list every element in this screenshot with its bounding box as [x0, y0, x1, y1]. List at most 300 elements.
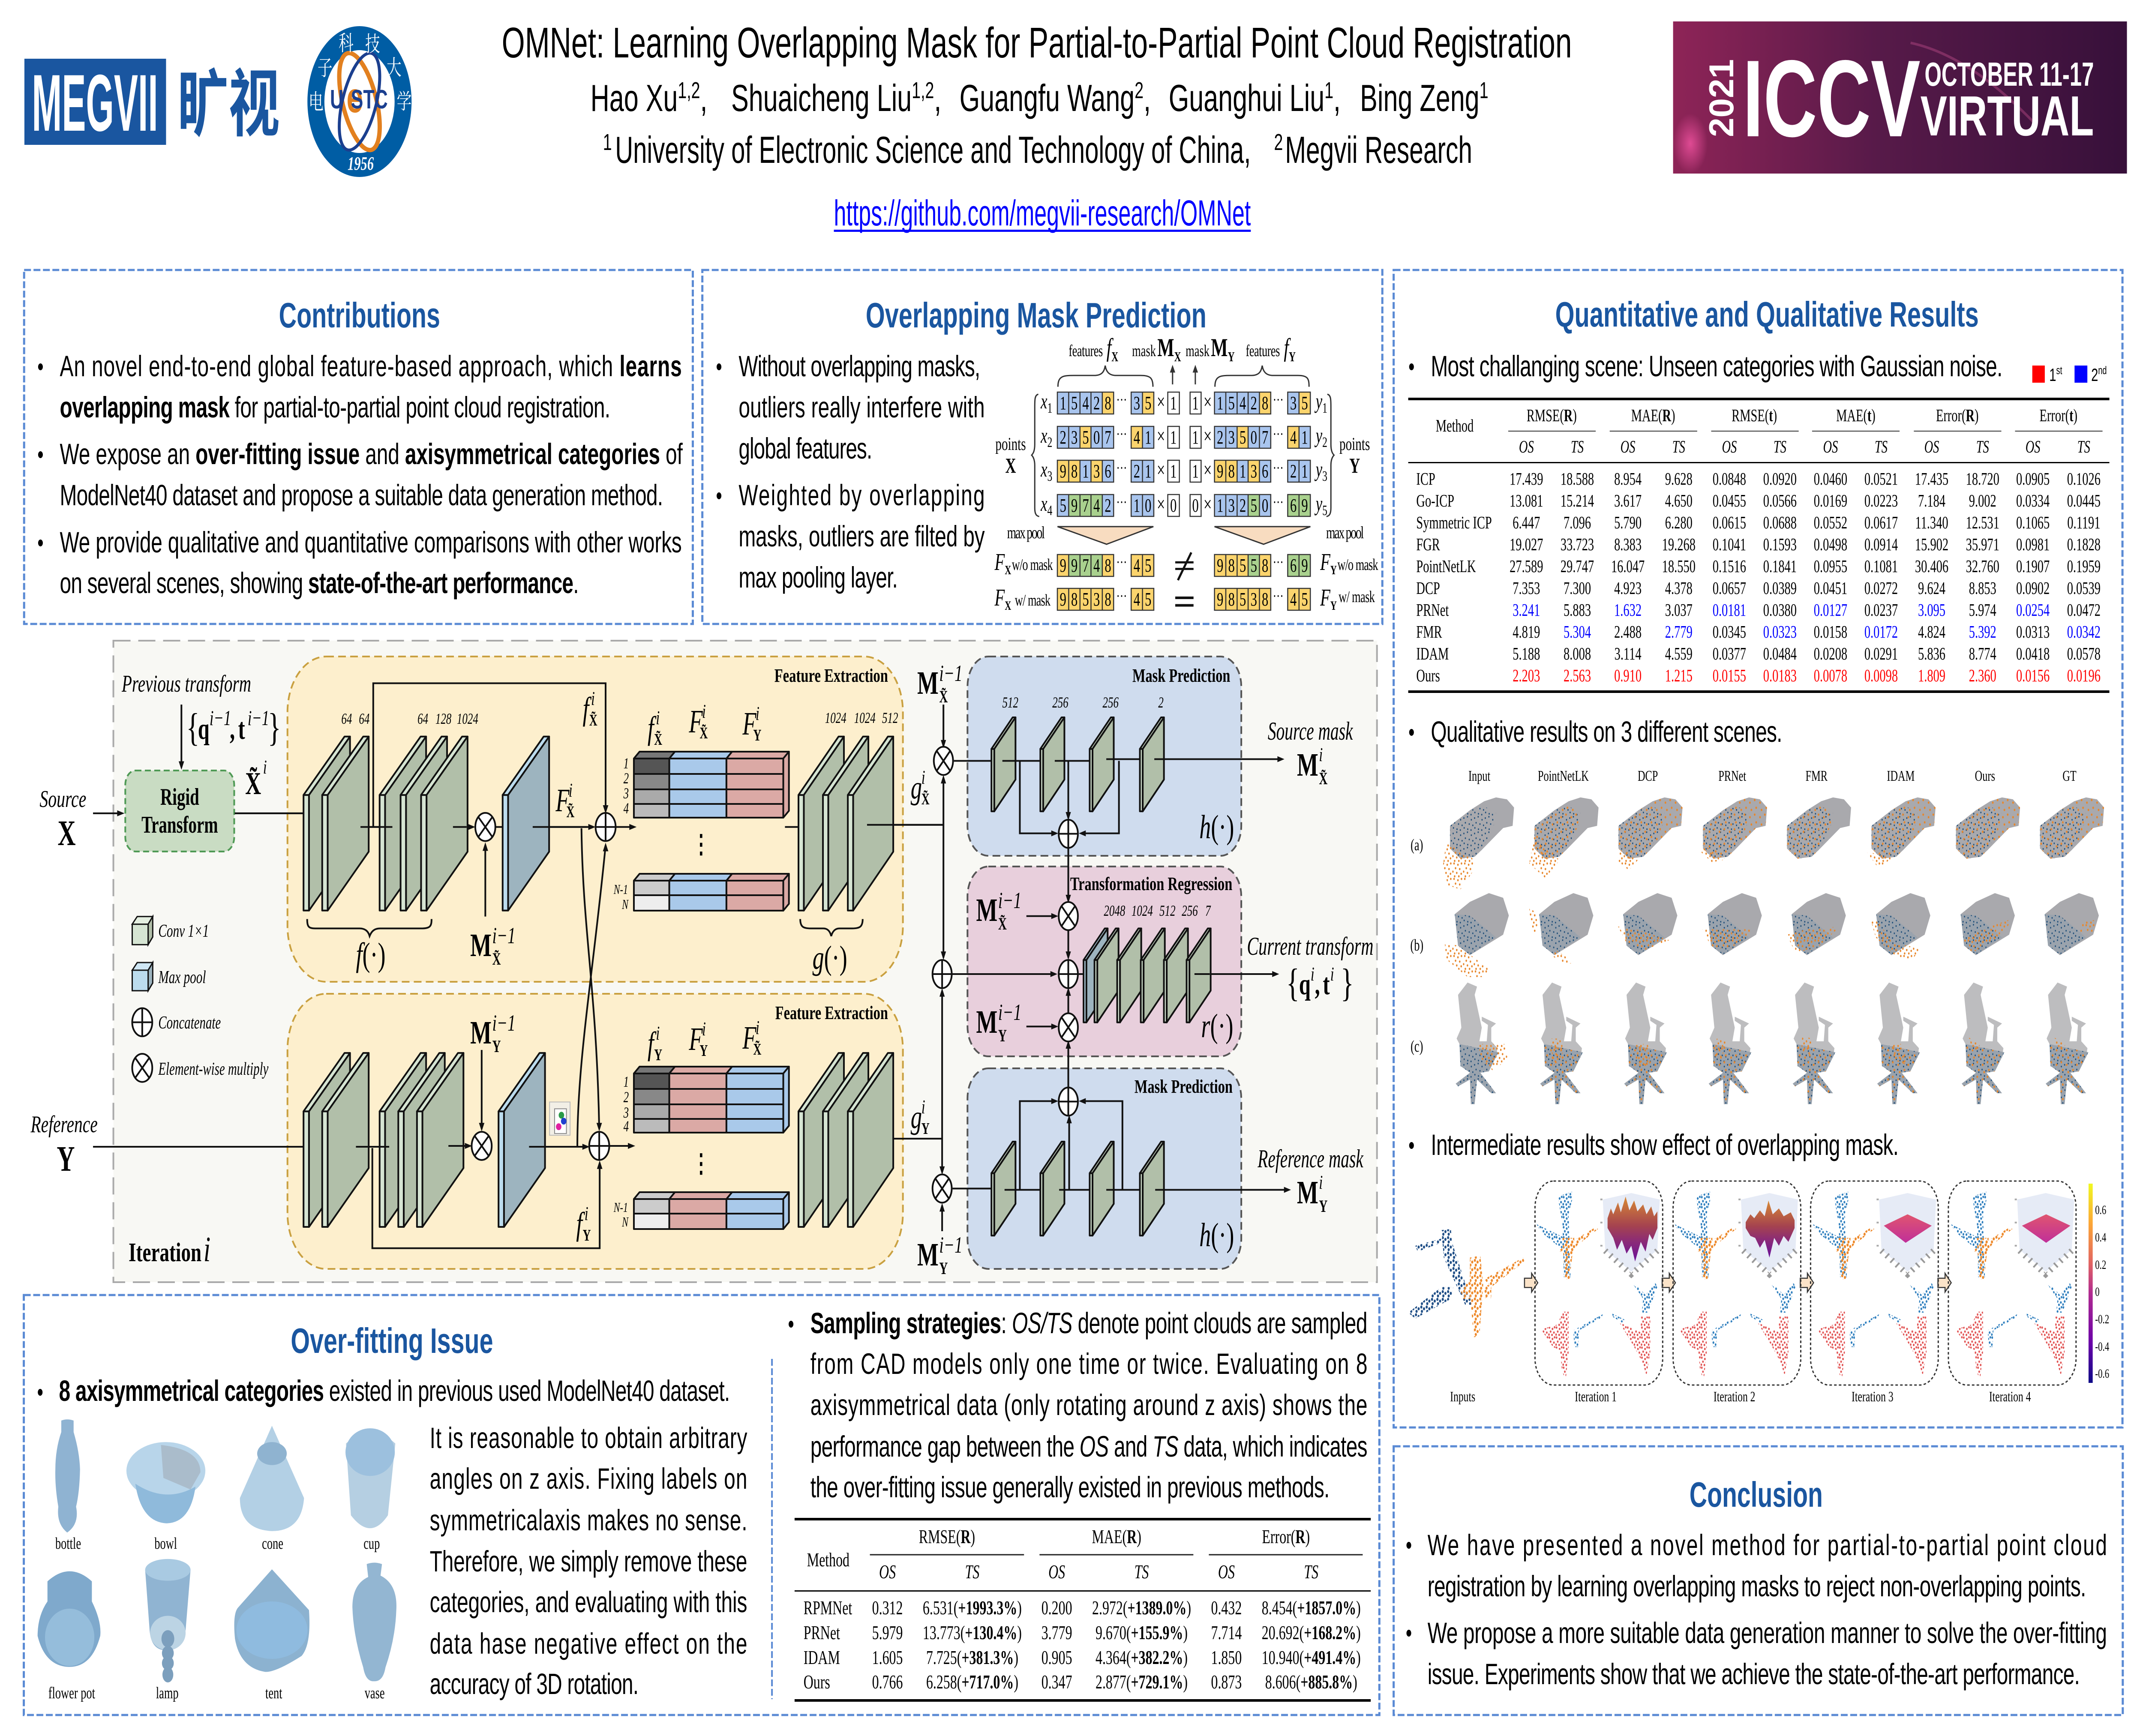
table: quantitative comparison: TS: [1571, 437, 1584, 456]
feature stacks: 2: [624, 1088, 629, 1106]
table: quantitative comparison: 8.774: [1969, 644, 1996, 663]
table: sampling strategy comparison: RPMNet: [804, 1597, 852, 1619]
max pool figure: ···: [1273, 553, 1284, 571]
max pool figure: ···: [1273, 391, 1284, 408]
axisymmetrical object thumbnails: bottle: [55, 1535, 81, 1553]
diagram text labels: Mask Prediction: [1132, 666, 1230, 686]
max pool figure: X: [1005, 563, 1011, 577]
table: quantitative comparison: [1408, 398, 2110, 693]
table: quantitative comparison: 6.280: [1665, 513, 1693, 532]
table: quantitative comparison: 0.0181: [1713, 600, 1746, 620]
table: quantitative comparison: 6.447: [1513, 513, 1540, 532]
bullet: sampling strategies: [789, 1306, 1368, 1504]
table: sampling strategy comparison: 9.670(+155.9%): [1096, 1622, 1188, 1643]
table: sampling strategy comparison: 5.979: [872, 1622, 903, 1643]
max pool figure: Y: [1330, 563, 1337, 577]
table: quantitative comparison: 0.0615: [1713, 513, 1746, 532]
table: quantitative comparison: 9.002: [1969, 491, 1996, 510]
table: quantitative comparison: 0.1516: [1713, 557, 1746, 576]
bullet: sampling strategies: Sampling strategies: OS/TS denote point clouds are sampled: [810, 1306, 1368, 1340]
legend: first and second place colours: nd: [2098, 364, 2107, 377]
diagram text labels: 256: [1103, 693, 1119, 711]
table: quantitative comparison: Symmetric ICP: [1416, 513, 1492, 532]
table: quantitative comparison: 0.0472: [2067, 600, 2101, 620]
table: quantitative comparison: 4.650: [1665, 491, 1693, 510]
table: quantitative comparison: 0.0451: [1814, 579, 1847, 598]
diagram text labels: Y: [699, 1042, 708, 1060]
table: quantitative comparison: 3.037: [1665, 600, 1693, 620]
paragraph: axis labels explanation: angles on z axis. Fixing labels on: [430, 1462, 747, 1495]
axisymmetrical object thumbnails: flower pot: [48, 1684, 95, 1702]
table: quantitative comparison: 0.910: [1614, 666, 1642, 685]
table: sampling strategy comparison: MAE(R): [1092, 1526, 1141, 1547]
diagram text labels: i: [569, 779, 573, 801]
table: quantitative comparison: 0.0313: [2016, 622, 2050, 642]
intermediate results figure: Iteration 2: [1714, 1389, 1755, 1405]
max pool figure: M: [1211, 334, 1228, 362]
qualitative results figure: PointNetLK: [1538, 768, 1589, 784]
table: sampling strategy comparison: Error(R): [1262, 1526, 1310, 1547]
paragraph: axis labels explanation: data hase negative effect on the: [430, 1627, 747, 1660]
intermediate results figure: Iteration 4: [1989, 1389, 2031, 1405]
diagram text labels: Iteration: [129, 1237, 201, 1267]
qualitative results figure: (c): [1411, 1037, 1423, 1055]
table: sampling strategy comparison: 1.605: [872, 1646, 903, 1668]
qualitative results figure: FMR: [1806, 768, 1828, 784]
diagram text labels: M: [470, 1015, 492, 1051]
max pool figure: y: [1316, 492, 1322, 516]
feature stacks: N-1: [613, 881, 628, 897]
table: sampling strategy comparison: 2.877(+729.1%): [1096, 1671, 1188, 1693]
table: quantitative comparison: Error(t): [2040, 406, 2077, 425]
max pool figure: ···: [1273, 425, 1284, 443]
table: sampling strategy comparison: 0.347: [1041, 1671, 1072, 1693]
diagram text labels: Reference mask: [1258, 1145, 1364, 1173]
axisymmetrical object thumbnails: lamp: [156, 1684, 179, 1702]
table: quantitative comparison: 0.0183: [1763, 666, 1797, 685]
table: quantitative comparison: 9.624: [1918, 579, 1945, 598]
overlapping mask bullet list: global features.: [738, 432, 872, 465]
table: quantitative comparison: 0.1065: [2016, 513, 2050, 532]
table: quantitative comparison: 0.0196: [2067, 666, 2101, 685]
max pool figure: x: [1041, 492, 1047, 516]
qualitative results figure: (a): [1411, 836, 1423, 854]
table: sampling strategy comparison: 0.873: [1211, 1671, 1242, 1693]
diagram text labels: M: [917, 666, 939, 701]
logo: UESTC seal: 学: [397, 90, 411, 114]
axisymmetrical object thumbnails: [38, 1419, 396, 1702]
missing image icon: [549, 1102, 570, 1135]
diagram text labels: Current transform: [1247, 932, 1373, 961]
max pool figure: 5974210001325069: [1060, 495, 1308, 516]
max pool figure: ···: [1117, 391, 1127, 408]
diagram text labels: ,: [230, 712, 235, 746]
table: quantitative comparison: 8.383: [1614, 535, 1642, 554]
table: quantitative comparison: 15.902: [1915, 535, 1948, 554]
table: quantitative comparison: OS: [1924, 437, 1939, 456]
diagram text labels: 1024: [854, 709, 876, 726]
authors: Hao Xu: [591, 77, 678, 120]
max pool figure: X: [1111, 349, 1118, 364]
table: quantitative comparison: 18.588: [1561, 469, 1594, 489]
table: quantitative comparison: 0.0342: [2067, 622, 2101, 642]
table: sampling strategy comparison: 0.200: [1041, 1597, 1072, 1619]
rigid transform box: Rigid: [160, 784, 199, 810]
diagram text labels: r(·): [1201, 1007, 1234, 1044]
diagram text labels: h(·): [1199, 1216, 1234, 1253]
table: quantitative comparison: 4.824: [1918, 622, 1945, 642]
authors: Shuaicheng Liu: [731, 77, 912, 120]
conclusion bullet list: We have presented a novel method for partial-to-partial point cloud: [1428, 1528, 2107, 1562]
max pool figure: ···: [1117, 493, 1127, 511]
table: quantitative comparison: 0.0418: [2016, 644, 2050, 663]
table: quantitative comparison: 0.0552: [1814, 513, 1847, 532]
table: quantitative comparison: 0.0981: [2016, 535, 2050, 554]
feature stacks: 4: [624, 799, 629, 817]
diagram text labels: M: [917, 1237, 939, 1273]
diagram text labels: F: [689, 704, 703, 740]
max pool figure: X: [1005, 598, 1011, 613]
max pool figure: w/ mask: [1339, 588, 1375, 606]
legend: first and second place colours: 1: [2049, 365, 2056, 385]
max pool figure: f: [1107, 334, 1111, 362]
diagram text labels: i−1: [939, 1233, 963, 1258]
table: sampling strategy comparison: TS: [1135, 1561, 1149, 1583]
network flow lines, layers left half: [93, 683, 636, 1248]
table: quantitative comparison: Method: [1436, 416, 1474, 435]
table: quantitative comparison: 0.0445: [2067, 491, 2101, 510]
axisymmetrical object thumbnails: cone: [262, 1535, 283, 1553]
table: quantitative comparison: 30.406: [1915, 557, 1948, 576]
diagram text labels: Y: [57, 1139, 75, 1179]
diagram text labels: X̃: [699, 724, 708, 742]
max pool figure: w/o mask: [1337, 556, 1378, 574]
table: quantitative comparison: 0.1907: [2016, 557, 2050, 576]
feature stacks: [613, 752, 789, 1229]
legend: first and second place colours: st: [2056, 364, 2062, 377]
max pool figure: points: [995, 434, 1026, 454]
diagram text labels: q: [198, 712, 210, 746]
table: quantitative comparison: 2.203: [1513, 666, 1540, 685]
diagram text labels: X̃: [1319, 769, 1328, 788]
diagram text labels: i: [656, 707, 660, 729]
table: quantitative comparison: TS: [1976, 437, 1989, 456]
intermediate results figure: 0.4: [2095, 1230, 2106, 1244]
diagram text labels: i−1: [998, 888, 1021, 914]
title: OMNet: Learning Overlapping Mask for Partial-to-Partial Point Cloud Registration: [502, 19, 1572, 67]
diagram text labels: 7: [1205, 902, 1211, 919]
qualitative results figure: (b): [1410, 936, 1423, 954]
diagram text labels: {: [1286, 961, 1300, 1005]
table: quantitative comparison: TS: [2077, 437, 2090, 456]
logo: UESTC seal: 技: [365, 33, 380, 57]
paragraph: axis labels explanation: symmetricalaxis makes no sense.: [430, 1503, 747, 1537]
table: quantitative comparison: TS: [1774, 437, 1786, 456]
qualitative results figure: Input: [1468, 768, 1491, 784]
region: mask prediction reference: [967, 1068, 1241, 1269]
table: sampling strategy comparison: PRNet: [804, 1622, 840, 1643]
table: sampling strategy comparison: 0.432: [1211, 1597, 1242, 1619]
diagram text labels: 512: [882, 709, 898, 726]
table: quantitative comparison: 0.0208: [1814, 644, 1847, 663]
table: quantitative comparison: 0.0905: [2016, 469, 2050, 489]
diagram text labels: F: [689, 1022, 703, 1057]
table: quantitative comparison: 0.0617: [1864, 513, 1898, 532]
intermediate results figure: [1408, 1181, 2109, 1405]
table: sampling strategy comparison: IDAM: [804, 1646, 840, 1668]
table: quantitative comparison: 18.550: [1662, 557, 1696, 576]
table: sampling strategy comparison: OS: [1218, 1561, 1235, 1583]
logo: UESTC seal: e: [346, 74, 363, 122]
table: quantitative comparison: 27.589: [1510, 557, 1543, 576]
table: quantitative comparison: 0.0127: [1814, 600, 1847, 620]
max pool figure: ···: [1117, 425, 1127, 443]
diagram text labels: 2048: [1104, 902, 1126, 919]
max pool figure: 4: [1047, 503, 1053, 519]
max pool figure: Y: [1289, 349, 1296, 364]
intermediate results figure: Iteration 1: [1575, 1389, 1617, 1405]
table: quantitative comparison: 13.081: [1510, 491, 1543, 510]
diagram text labels: i: [1330, 963, 1334, 985]
heading: contributions: Contributions: [279, 296, 440, 336]
diagram text labels: Reference: [30, 1111, 98, 1138]
diagram text labels: q: [1299, 968, 1311, 1001]
logo: UESTC seal: 科: [339, 32, 354, 56]
max pool figure: F: [995, 585, 1005, 611]
diagram text labels: 128: [435, 710, 452, 727]
table: quantitative comparison: RMSE(t): [1732, 406, 1777, 425]
table: quantitative comparison: 1.632: [1614, 600, 1642, 620]
authors: ,: [700, 77, 707, 120]
authors: Guangfu Wang: [960, 77, 1135, 120]
table: sampling strategy comparison: 2.972(+1389.0%): [1092, 1597, 1191, 1619]
table: quantitative comparison: PointNetLK: [1416, 557, 1476, 576]
table: quantitative comparison: 0.0223: [1864, 491, 1898, 510]
table: quantitative comparison: 8.954: [1614, 469, 1642, 489]
diagram text labels: Y: [921, 1120, 930, 1138]
rigid transform box: [125, 771, 234, 852]
heading: over-fitting issue: Over-fitting Issue: [291, 1321, 493, 1361]
diagram text labels: f: [583, 691, 592, 727]
feature stacks: N: [621, 1214, 629, 1229]
icon: bowl: [126, 1442, 205, 1523]
bullet: sampling strategies: performance gap between the OS and TS data, which indicates: [810, 1430, 1368, 1463]
qualitative results figure: GT: [2062, 768, 2077, 784]
max pool figure: f: [1284, 334, 1289, 362]
diagram text labels: }: [268, 706, 281, 750]
table: quantitative comparison: Go-ICP: [1416, 491, 1454, 510]
max pool figure: ×: [1204, 425, 1212, 448]
table: quantitative comparison: 0.0323: [1763, 622, 1797, 642]
table: sampling strategy comparison: 7.714: [1211, 1622, 1242, 1643]
diagram text labels: f(·): [356, 936, 386, 973]
axisymmetrical object thumbnails: bowl: [154, 1535, 177, 1553]
legend icons: [132, 917, 153, 1082]
max pool figure: 3: [1322, 468, 1327, 484]
diagram text labels: 1024: [457, 710, 478, 727]
paragraph: axis labels explanation: [430, 1421, 747, 1700]
diagram text labels: Element-wise multiply: [158, 1059, 269, 1079]
table: quantitative comparison: IDAM: [1416, 644, 1449, 663]
authors: ,: [1144, 77, 1151, 120]
diagram text labels: M: [976, 1004, 997, 1040]
table: quantitative comparison: 4.378: [1665, 579, 1693, 598]
bullet: intermediate results: Intermediate results show effect of overlapping mask.: [1431, 1128, 1899, 1161]
table: quantitative comparison: MAE(t): [1836, 406, 1876, 425]
diagram text labels: 256: [1182, 902, 1198, 919]
table: quantitative comparison: 0.1191: [2067, 513, 2100, 532]
feature stacks: ⋮: [692, 1150, 710, 1178]
table: quantitative comparison: ICP: [1416, 469, 1435, 489]
table: quantitative comparison: 0.1593: [1763, 535, 1797, 554]
diagram text labels: g(·): [813, 939, 847, 976]
table: quantitative comparison: 3.114: [1615, 644, 1642, 663]
table: sampling strategy comparison: TS: [965, 1561, 979, 1583]
qualitative results figure: DCP: [1638, 768, 1658, 784]
max pool figure: w/o mask: [1012, 556, 1053, 574]
diagram text labels: Y: [753, 726, 761, 744]
diagram text labels: Y: [654, 1046, 662, 1064]
max pool figure: ···: [1273, 493, 1284, 511]
authors: ,: [1333, 77, 1341, 120]
overlapping mask bullet list: max pooling layer.: [738, 561, 898, 594]
table: quantitative comparison: 0.0455: [1713, 491, 1746, 510]
table: quantitative comparison: 0.0172: [1864, 622, 1898, 642]
max pool figure: ···: [1273, 587, 1284, 605]
max pool figure: 2: [1322, 435, 1327, 450]
table: sampling strategy comparison: OS: [879, 1561, 896, 1583]
max pool figure: Y: [1349, 454, 1360, 478]
icon: cone: [240, 1426, 304, 1531]
diagram text labels: X̃: [566, 803, 575, 821]
table: quantitative comparison: 0.0389: [1763, 579, 1797, 598]
contributions bullet list: on several scenes, showing state-of-the-art performance.: [60, 566, 579, 600]
diagram text labels: X: [57, 813, 76, 853]
authors: 1: [1324, 77, 1333, 103]
authors: Bing Zeng: [1360, 77, 1480, 120]
table: quantitative comparison: 9.628: [1665, 469, 1693, 489]
diagram text labels: i−1: [210, 707, 231, 730]
conclusion bullet list: We propose a more suitable data generation manner to solve the over-fitting: [1428, 1616, 2107, 1649]
feature stacks: 3: [623, 784, 629, 802]
table: sampling strategy comparison: 7.725(+381.3%): [926, 1646, 1018, 1668]
table: quantitative comparison: 1.215: [1665, 666, 1693, 685]
max pool figure: 2: [1047, 435, 1052, 450]
max pool figure: Y: [1330, 598, 1337, 613]
diagram text labels: i−1: [492, 1011, 516, 1036]
diagram text labels: 512: [1002, 693, 1018, 711]
rigid transform box: Transform: [141, 812, 218, 838]
max pool figure: w/ mask: [1015, 591, 1051, 609]
table: quantitative comparison: TS: [1875, 437, 1888, 456]
bullet: most challenging scene: Most challanging scene: Unseen categories with Gaussian noise.: [1431, 349, 2002, 383]
table: quantitative comparison: 5.304: [1564, 622, 1591, 642]
paragraph: axis labels explanation: accuracy of 3D rotation.: [430, 1667, 639, 1700]
max pool figure: ×: [1157, 459, 1165, 482]
table: quantitative comparison: 5.790: [1614, 513, 1642, 532]
feature stacks: 2: [624, 769, 629, 787]
contributions bullet list: We provide qualitative and quantitative comparisons with other works: [60, 525, 682, 559]
table: quantitative comparison: 0.0155: [1713, 666, 1746, 685]
qualitative results figure: IDAM: [1887, 768, 1915, 784]
logo: UESTC seal: 子: [318, 57, 333, 81]
table: quantitative comparison: 0.0158: [1814, 622, 1847, 642]
diagram text labels: i−1: [998, 1000, 1021, 1025]
table: sampling strategy comparison: 1.850: [1211, 1646, 1242, 1668]
diagram text labels: h(·): [1199, 808, 1234, 846]
table: sampling strategy comparison: 0.905: [1041, 1646, 1072, 1668]
table: quantitative comparison: 0.0237: [1864, 600, 1898, 620]
table: quantitative comparison: 0.1841: [1763, 557, 1797, 576]
table: quantitative comparison: 2.779: [1665, 622, 1693, 642]
diagram text labels: Y: [998, 1026, 1007, 1045]
table: quantitative comparison: OS: [1519, 437, 1534, 456]
icon: bottle: [55, 1419, 80, 1532]
table: quantitative comparison: 0.1828: [2067, 535, 2101, 554]
diagram text labels: X̃: [998, 914, 1007, 933]
diagram text labels: X̃: [753, 1040, 762, 1058]
table: sampling strategy comparison: 0.312: [872, 1597, 903, 1619]
diagram text labels: i: [921, 1096, 925, 1118]
table: quantitative comparison: 8.008: [1564, 644, 1591, 663]
diagram text labels: Y: [583, 1226, 591, 1244]
table: sampling strategy comparison: 6.258(+717.0%): [926, 1671, 1018, 1693]
panel: overlapping mask prediction: [702, 270, 1382, 624]
intermediate results figure: -0.6: [2095, 1366, 2109, 1381]
table: quantitative comparison: OS: [2026, 437, 2041, 456]
diagram text labels: X̃: [245, 766, 261, 801]
table: quantitative comparison: 7.353: [1513, 579, 1540, 598]
table: quantitative comparison: 0.0920: [1763, 469, 1797, 489]
table: quantitative comparison: 35.971: [1966, 535, 1999, 554]
table: quantitative comparison: 0.0484: [1763, 644, 1797, 663]
max pool figure: F: [1320, 549, 1330, 576]
icon: cup: [345, 1428, 395, 1528]
authors: 2: [1135, 77, 1144, 103]
axisymmetrical object thumbnails: tent: [265, 1684, 282, 1702]
table: quantitative comparison: 3.095: [1918, 600, 1945, 620]
authors: 1: [1480, 77, 1489, 103]
table: quantitative comparison: 0.0169: [1814, 491, 1847, 510]
max pool figure: x: [1041, 424, 1047, 448]
max pool figure: x: [1041, 390, 1047, 414]
table: quantitative comparison: 2.563: [1564, 666, 1591, 685]
diagram text labels: }: [1341, 961, 1354, 1005]
diagram text labels: i: [756, 702, 759, 724]
diagram text labels: M: [470, 928, 492, 963]
panel: over-fitting issue: [24, 1295, 1379, 1715]
bullet: sampling strategies: from CAD models only one time or twice. Evaluating on 8: [810, 1347, 1368, 1380]
qualitative results figure: [1410, 768, 2104, 1104]
table: quantitative comparison: 7.300: [1564, 579, 1591, 598]
table: sampling strategy comparison: 4.364(+382.2%): [1096, 1646, 1188, 1668]
max pool figure: mask: [1132, 342, 1156, 360]
max pool figure: F: [1320, 585, 1330, 611]
diagram text labels: 1024: [825, 709, 846, 726]
diagram text labels: i: [591, 687, 595, 709]
feature stacks: 1: [624, 754, 629, 772]
diagram text labels: i−1: [492, 923, 516, 949]
diagram text labels: Previous transform: [121, 671, 251, 697]
table: sampling strategy comparison: 8.454(+1857.0%): [1262, 1597, 1361, 1619]
diagram text labels: M: [1297, 747, 1318, 783]
table: quantitative comparison: 0.0566: [1763, 491, 1797, 510]
panel: contributions: [24, 270, 693, 624]
table: quantitative comparison: 19.027: [1510, 535, 1543, 554]
diagram text labels: X̃: [492, 950, 501, 968]
max pool figure: x: [1041, 458, 1047, 482]
table: quantitative comparison: 0.0578: [2067, 644, 2101, 663]
